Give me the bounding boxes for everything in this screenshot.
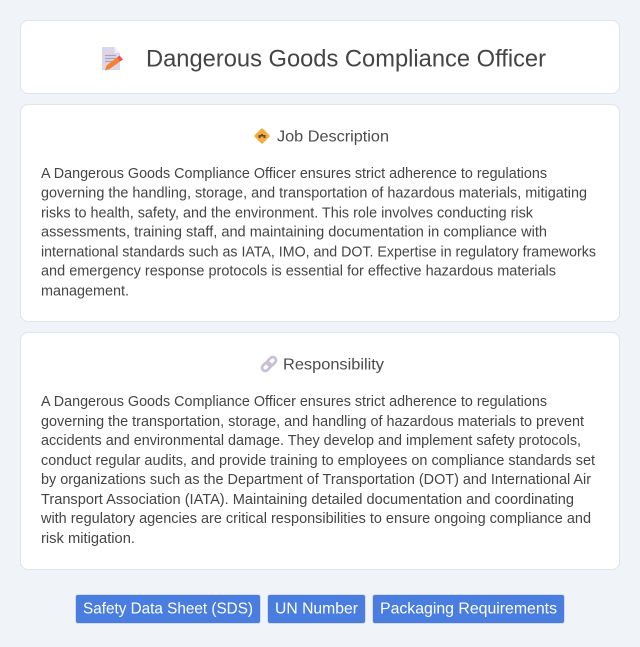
tag: UN Number: UN Number	[275, 600, 359, 618]
tag: Packaging Requirements	[372, 594, 565, 624]
text block: responsibility: Transport Association (IATA). Maintaining detailed documentation and coordinating	[41, 492, 574, 508]
icon: chain link	[260, 356, 278, 372]
tag: Packaging Requirements: Packaging Requirements	[380, 600, 557, 618]
text block: job description: and emergency response protocols is essential for effective hazardous materials	[41, 264, 556, 280]
text block: job description: A Dangerous Goods Compliance Officer ensures strict adherence to regulations	[41, 166, 547, 182]
text block: responsibility: by organizations such as the Department of Transportation (DOT) and International Air	[41, 472, 591, 488]
text block: job description: international standards such as IATA, IMO, and DOT. Expertise in regulatory frameworks	[41, 244, 596, 260]
tag: Safety Data Sheet (SDS)	[75, 594, 261, 624]
text block: job description: assessments, training staff, and maintaining documentation in compliance with	[41, 224, 547, 240]
text block: job description	[41, 166, 596, 300]
tag: UN Number	[267, 594, 366, 624]
heading: responsibility: Responsibility	[283, 356, 384, 374]
heading: job description: Job Description	[277, 128, 389, 146]
icon: orange warning diamond	[254, 128, 270, 144]
text block: responsibility: conduct regular audits, and provide training to employees on compliance standards set	[41, 453, 595, 469]
text block: responsibility: with regulatory agencies are critical responsibilities to ensure ongoing compliance and	[40, 511, 591, 527]
panel: title card	[20, 20, 620, 94]
panel: job description	[20, 104, 620, 322]
text block: job description: governing the handling, storage, and transportation of hazardous materials, mitigating	[41, 186, 587, 202]
title: Dangerous Goods Compliance Officer	[146, 46, 546, 72]
text block: responsibility: A Dangerous Goods Compliance Officer ensures strict adherence to regulations	[41, 394, 547, 410]
text block: job description: management.	[41, 284, 129, 300]
panel: responsibility	[20, 332, 620, 570]
text block: responsibility: governing the transportation, storage, and handling of hazardous materials to prevent	[41, 414, 584, 430]
tag: Safety Data Sheet (SDS): Safety Data Sheet (SDS)	[83, 600, 253, 618]
icon: document with pencil	[102, 47, 123, 70]
text block: job description: risks to health, safety, and the environment. This role involves conducting risk	[41, 206, 534, 222]
text block: responsibility: risk mitigation.	[41, 531, 135, 547]
text block: responsibility: accidents and environmental damage. They develop and implement safety protocols,	[41, 433, 581, 449]
